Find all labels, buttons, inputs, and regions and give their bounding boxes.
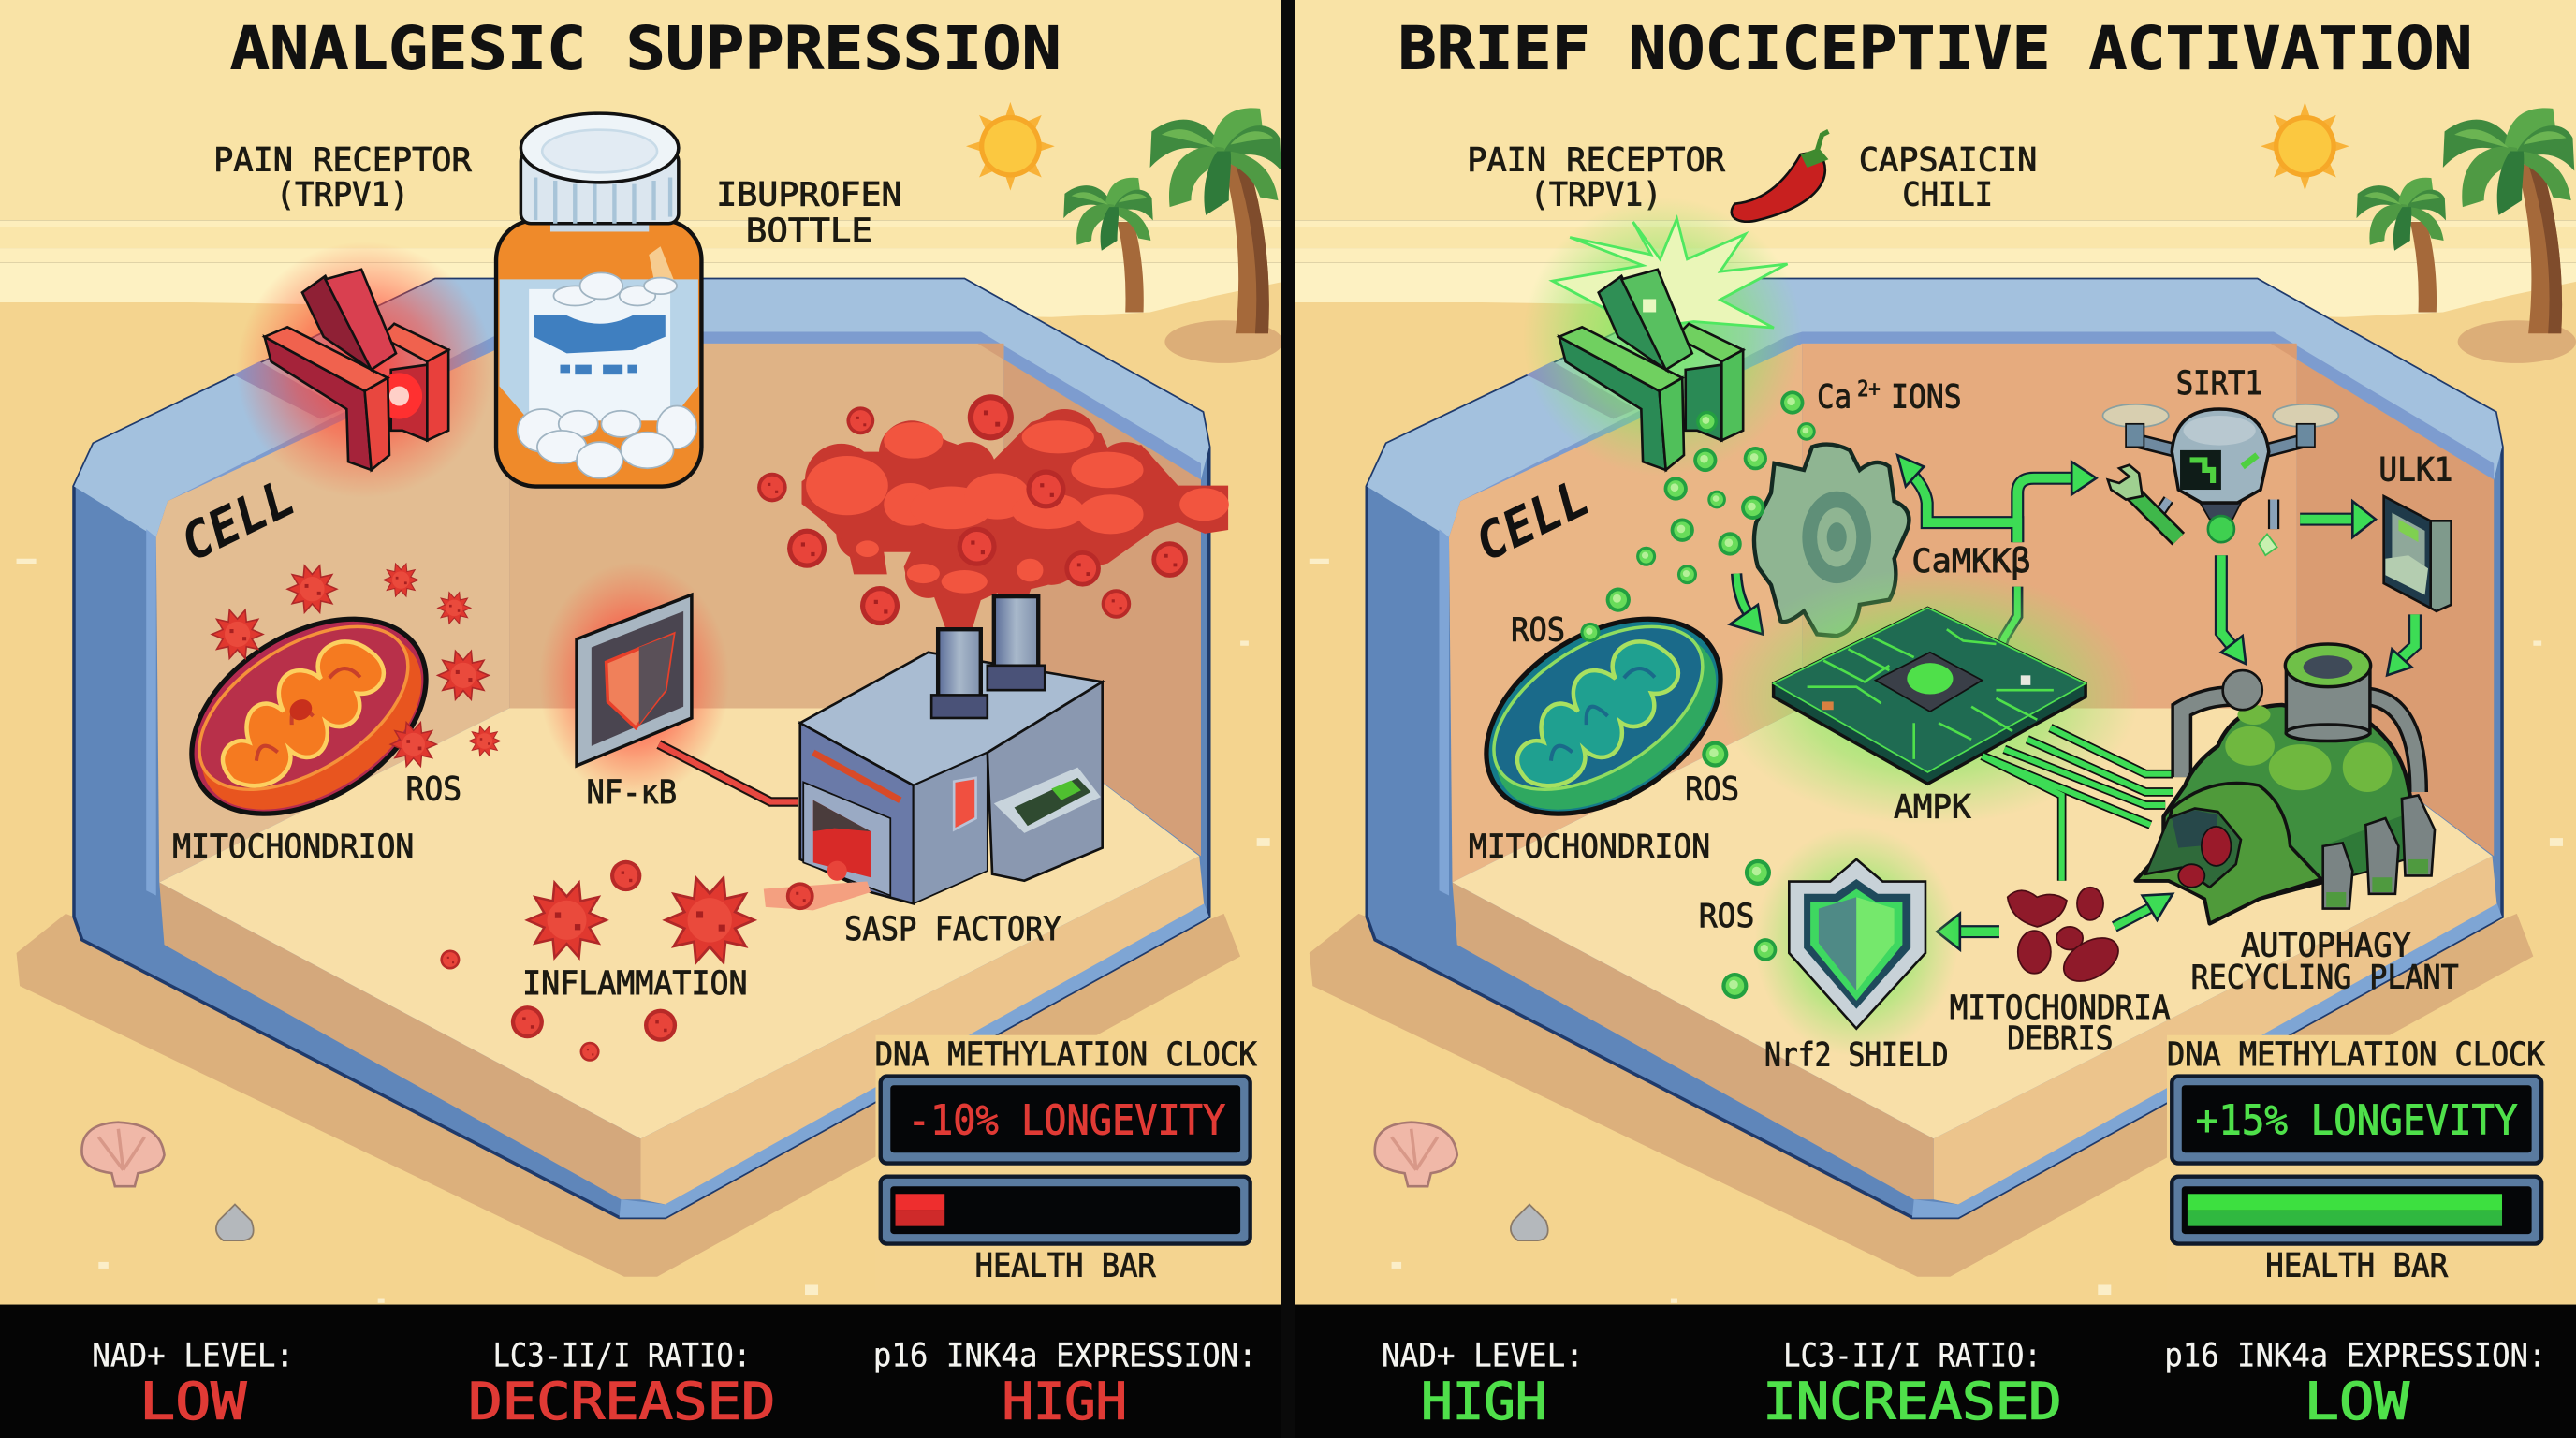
label: ibuprofen bottle: IBUPROFEN — [716, 175, 902, 213]
icon: red glowing pain receptor — [237, 242, 493, 498]
label: mitochondria debris: DEBRIS — [2007, 1020, 2114, 1058]
icon: ULK1 switch — [2384, 496, 2452, 611]
label: SIRT1: SIRT1 — [2176, 364, 2262, 403]
label: pain receptor: (TRPV1) — [276, 175, 409, 213]
pathway arrows from SIRT1 and ULK1 — [2221, 501, 2415, 675]
icon: NF-kB shield panel — [539, 562, 729, 799]
health bar high — [2172, 1177, 2541, 1285]
inflammation particles — [440, 860, 754, 1062]
background: beach with sea stripes, palms and sun — [1293, 0, 2576, 1314]
label: CaMKK-beta: CaMKKβ — [1911, 542, 2031, 580]
label: ibuprofen bottle: BOTTLE — [746, 212, 872, 250]
label: autophagy recycling plant — [2191, 926, 2459, 996]
label: ULK1: ULK1 — [2378, 450, 2452, 489]
DNA methylation clock readout — [2167, 1035, 2553, 1290]
footer stats: brief nociceptive activation: HIGH — [1421, 1372, 1546, 1431]
footer stats: brief nociceptive activation — [1292, 1305, 2576, 1438]
label: AMPK: AMPK — [1894, 788, 1971, 827]
ROS dots and label near shield: ROS — [1699, 897, 1754, 935]
label: mitochondrion: MITOCHONDRION — [172, 828, 414, 866]
DNA methylation clock readout — [875, 1035, 1262, 1290]
label: pain receptor — [213, 141, 473, 213]
footer stats: brief nociceptive activation: LC3-II/I RATIO: — [1783, 1336, 2042, 1374]
label: Ca2+ ions: IONS — [1891, 377, 1962, 416]
label: pain receptor: PAIN RECEPTOR — [213, 141, 473, 180]
label: mitochondria debris — [1950, 989, 2170, 1058]
label: SASP factory: SASP FACTORY — [844, 910, 1061, 948]
health bar low: HEALTH BAR — [975, 1247, 1156, 1285]
title: BRIEF NOCICEPTIVE ACTIVATION — [1398, 14, 2472, 83]
label: pain receptor — [1467, 141, 1726, 213]
label: inflammation: INFLAMMATION — [522, 964, 748, 1003]
label: ibuprofen bottle — [716, 175, 902, 250]
footer stats: analgesic suppression — [0, 1305, 1284, 1438]
label: pain receptor: (TRPV1) — [1530, 175, 1661, 213]
label: Ca2+ ions — [1817, 377, 1962, 416]
health bar low — [881, 1177, 1251, 1285]
icon: SASP factory with smoke — [757, 394, 1229, 910]
label: cell: CELL — [171, 468, 304, 573]
icon: autophagy recycling plant — [2136, 644, 2435, 923]
DNA methylation clock readout: -10% LONGEVITY — [908, 1097, 1225, 1145]
label: NF-kB: NF-κB — [587, 773, 677, 812]
footer stats: brief nociceptive activation: LOW — [2305, 1372, 2409, 1431]
icon: mitochondria debris — [2008, 888, 2126, 990]
label: cell: CELL — [1466, 468, 1599, 573]
panel: brief nociceptive activation — [1292, 0, 2576, 1438]
footer stats: brief nociceptive activation: NAD+ LEVEL: — [1382, 1336, 1584, 1374]
label: Nrf2 shield: Nrf2 SHIELD — [1764, 1035, 1949, 1074]
icon: mitochondrion healthy — [1451, 579, 1756, 854]
footer stats: analgesic suppression: LC3-II/I RATIO: — [493, 1336, 751, 1374]
icon: capsaicin chili — [1732, 131, 1828, 222]
icon: CaMKK-beta gear — [1754, 445, 1909, 636]
pathway arrows from CaMKK-beta — [1730, 455, 2097, 657]
decoration: shell — [1375, 1123, 1457, 1186]
footer stats: analgesic suppression: p16 INK4a EXPRESSION: — [873, 1336, 1257, 1374]
background: beach with sea stripes, palms and sun — [0, 0, 1295, 1314]
cell structure — [17, 279, 1240, 1277]
cell structure — [1310, 279, 2533, 1277]
DNA methylation clock readout: +15% LONGEVITY — [2196, 1097, 2518, 1145]
footer stats: analgesic suppression: HIGH — [1003, 1372, 1127, 1431]
ROS labels near mitochondrion: ROS — [1685, 770, 1739, 809]
footer stats: brief nociceptive activation: p16 INK4a EXPRESSION: — [2164, 1336, 2546, 1374]
decoration: pebble — [1511, 1204, 1548, 1240]
health bar high: HEALTH BAR — [2265, 1247, 2449, 1285]
panel: analgesic suppression — [0, 0, 1295, 1438]
label: pain receptor: PAIN RECEPTOR — [1467, 141, 1726, 180]
footer stats: analgesic suppression: DECREASED — [468, 1372, 775, 1431]
label: mitochondria debris: MITOCHONDRIA — [1950, 989, 2170, 1027]
title: ANALGESIC SUPPRESSION — [230, 14, 1061, 83]
label: Ca2+ ions: 2+ — [1857, 377, 1881, 402]
Ca2+ ions stream — [1580, 390, 1816, 642]
circuit traces to recycling plant and debris — [1983, 728, 2174, 881]
ROS dots and label near shield — [1699, 859, 1777, 999]
icon: ibuprofen bottle — [496, 113, 701, 487]
DNA methylation clock readout: DNA METHYLATION CLOCK — [2167, 1035, 2545, 1074]
footer stats: analgesic suppression: LOW — [139, 1372, 247, 1431]
DNA methylation clock readout: DNA METHYLATION CLOCK — [875, 1035, 1257, 1074]
icon: green activated pain receptor with burst — [1523, 198, 1802, 477]
decoration: shell — [81, 1123, 165, 1186]
icon: SIRT1 repair drone — [2103, 404, 2338, 555]
label: autophagy recycling plant: AUTOPHAGY — [2241, 926, 2411, 964]
label: autophagy recycling plant: RECYCLING PLANT — [2191, 958, 2459, 996]
label: Ca2+ ions: Ca — [1817, 377, 1852, 416]
footer stats: analgesic suppression: NAD+ LEVEL: — [92, 1336, 294, 1374]
icon: AMPK circuit board chip — [1719, 568, 2139, 825]
ROS labels near mitochondrion — [1511, 610, 1739, 809]
ROS labels near mitochondrion: ROS — [1511, 610, 1565, 649]
icon: damaged mitochondrion — [156, 579, 461, 854]
decoration: pebble — [216, 1204, 254, 1240]
label: capsaicin chili — [1859, 141, 2037, 213]
label: mitochondrion: MITOCHONDRION — [1469, 828, 1710, 866]
arrows from debris — [1937, 894, 2173, 949]
panel divider — [1281, 0, 1295, 1438]
label: capsaicin chili: CAPSAICIN — [1859, 141, 2037, 180]
icon: Nrf2 shield — [1754, 827, 1958, 1057]
label: ROS: ROS — [406, 770, 461, 809]
label: capsaicin chili: CHILI — [1902, 175, 1993, 213]
connector: NF-kB to factory — [659, 744, 798, 801]
ROS particles around mitochondrion — [212, 564, 500, 766]
footer stats: brief nociceptive activation: INCREASED — [1763, 1372, 2062, 1431]
